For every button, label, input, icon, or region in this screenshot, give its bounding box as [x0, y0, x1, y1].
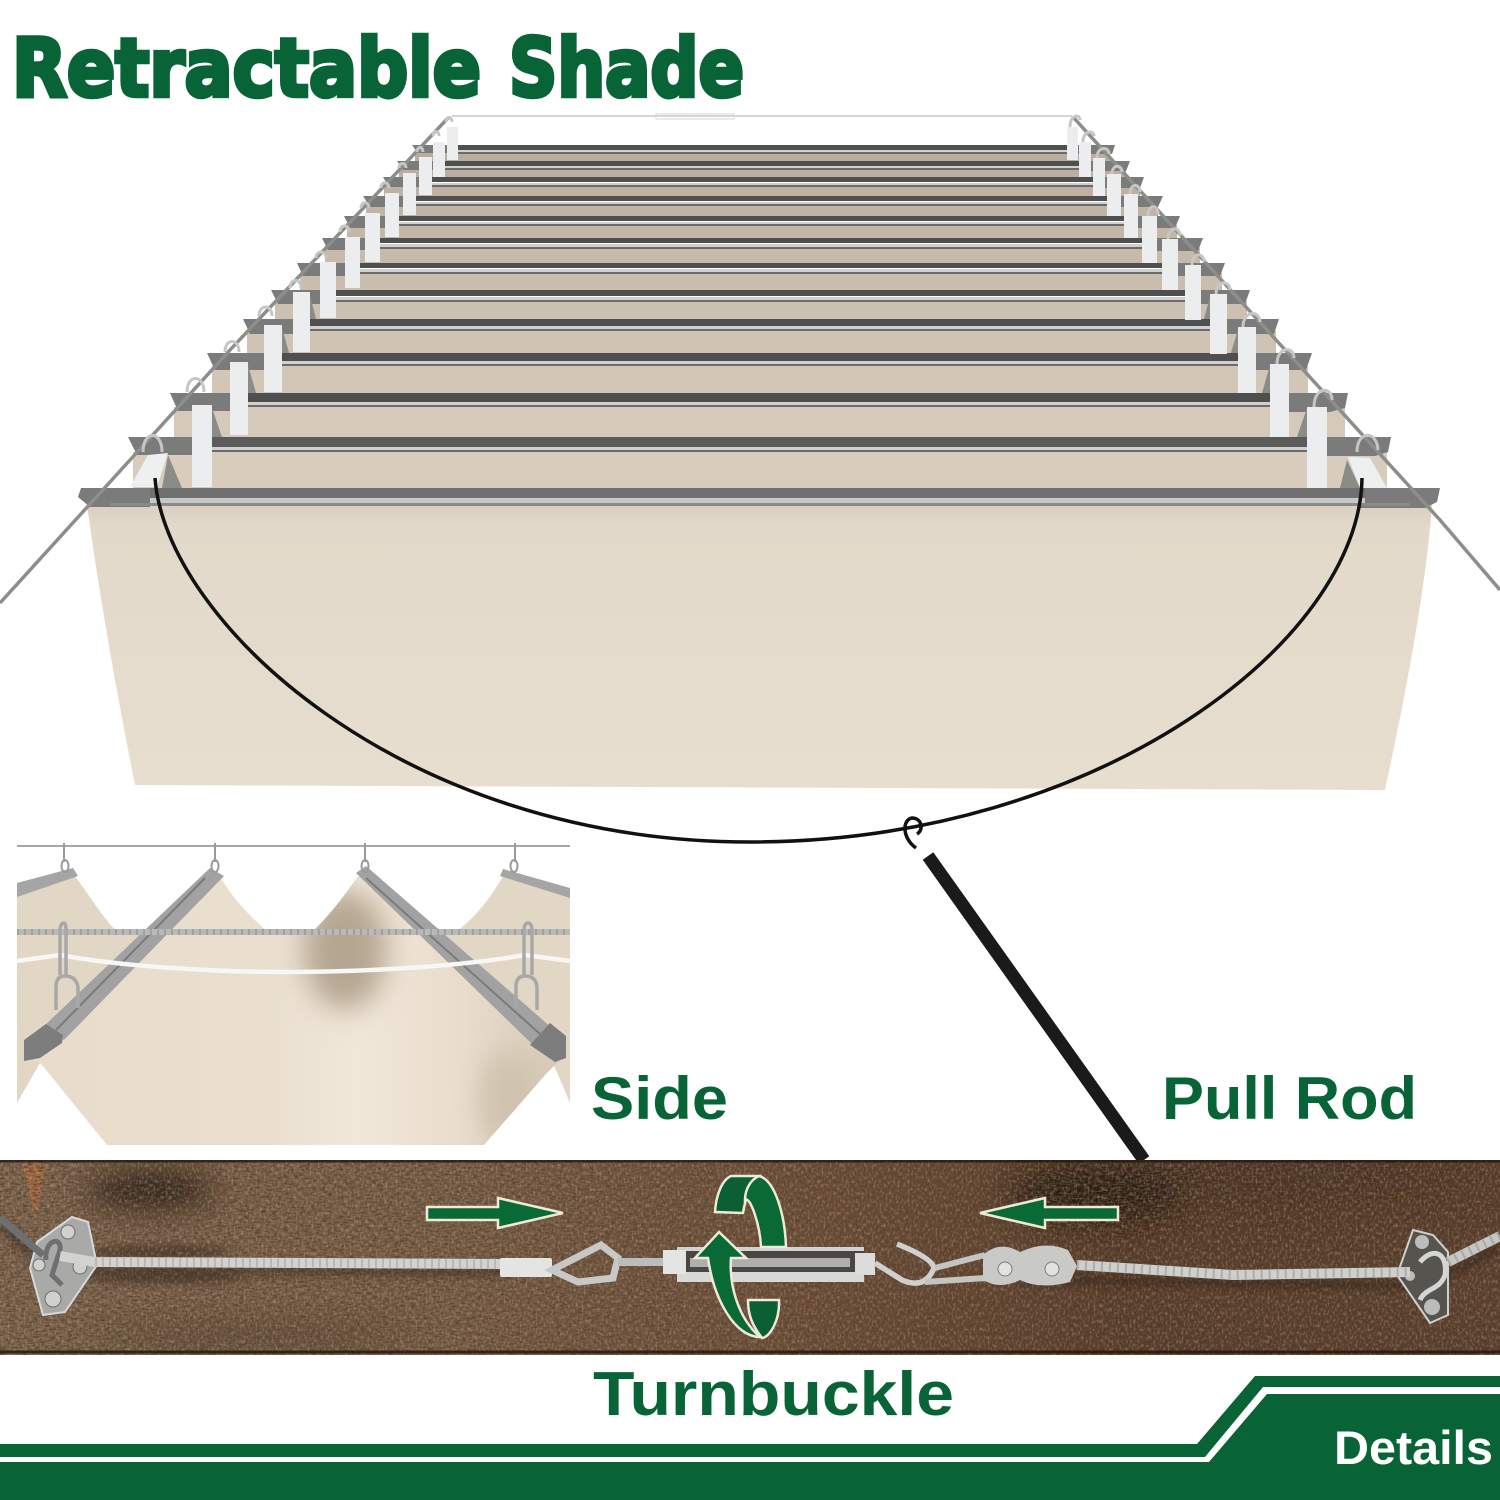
top hooks	[62, 843, 518, 872]
ferrule	[500, 1258, 552, 1277]
right anchor plate	[1397, 1230, 1448, 1323]
black pull cord	[155, 478, 1362, 842]
back band upper	[715, 1176, 759, 1213]
wood knot	[22, 1163, 46, 1220]
left anchor plate	[30, 1217, 97, 1315]
front end straps	[130, 453, 1387, 488]
upper stripe	[0, 1376, 1500, 1457]
side rails at edges	[17, 868, 570, 898]
wood beam	[0, 1155, 1500, 1355]
front rail	[78, 488, 1440, 508]
side detail panel	[17, 843, 570, 1150]
compression arrow left	[427, 1198, 563, 1228]
front band upper	[745, 1176, 786, 1247]
steel cable	[17, 929, 570, 935]
wire thimble	[552, 1245, 618, 1282]
title word: retractable: Retractable	[12, 22, 481, 115]
title word: shade: Shade	[509, 22, 744, 115]
rail shadow lines	[205, 153, 1320, 451]
arrow shaft and head	[695, 1232, 760, 1337]
compression arrow right	[980, 1198, 1118, 1228]
title	[12, 22, 744, 115]
front fabric	[28, 873, 560, 1145]
fabric rows	[133, 153, 1387, 488]
wire clamp	[983, 1245, 1077, 1286]
rail end caps	[128, 145, 1391, 456]
left carabiner and shackle	[56, 923, 78, 1010]
right rail	[356, 866, 552, 1044]
hook	[875, 1244, 934, 1283]
dark patches	[85, 1155, 1500, 1347]
rails silver lower	[205, 150, 1320, 450]
wire loop	[925, 1255, 985, 1282]
back band lower	[748, 1300, 779, 1338]
rod shaft	[928, 856, 1144, 1160]
rod hook	[905, 818, 921, 848]
turnbuckle	[618, 1247, 875, 1282]
right straps	[1067, 127, 1327, 488]
rear fabric peaks	[17, 873, 570, 1103]
footer band	[0, 1376, 1500, 1500]
rotation arrow	[695, 1176, 786, 1338]
label: turnbuckle: Turnbuckle	[593, 1360, 954, 1429]
top guide wire	[452, 114, 1072, 119]
steel wire left	[0, 1218, 510, 1264]
rails dark upper	[205, 145, 1320, 447]
front fabric panel	[87, 505, 1432, 790]
wire shadow	[0, 1225, 1500, 1286]
right carabiner and shackle	[516, 923, 537, 1010]
left rail	[42, 868, 224, 1040]
shade illustration	[0, 114, 1500, 842]
label: side: Side	[591, 1065, 728, 1132]
left cable	[0, 118, 448, 603]
pull rod	[905, 818, 1144, 1160]
steel wire right	[1077, 1236, 1500, 1275]
label: pull rod: Pull Rod	[1162, 1065, 1417, 1132]
wood base	[0, 1160, 1500, 1355]
wood grain	[0, 1160, 1500, 1355]
white tape	[17, 955, 570, 972]
left straps	[192, 127, 458, 487]
top wire	[17, 845, 570, 847]
cable rings	[143, 116, 1378, 452]
wood highlights	[0, 1160, 1500, 1355]
lower block	[0, 1394, 1500, 1500]
strap shadows	[162, 295, 1360, 488]
rail end caps	[24, 1023, 566, 1062]
top and bottom edges	[0, 1161, 1500, 1352]
details label: Details	[1334, 1421, 1493, 1474]
right cable	[1073, 117, 1500, 590]
fabric shading	[303, 890, 540, 1150]
